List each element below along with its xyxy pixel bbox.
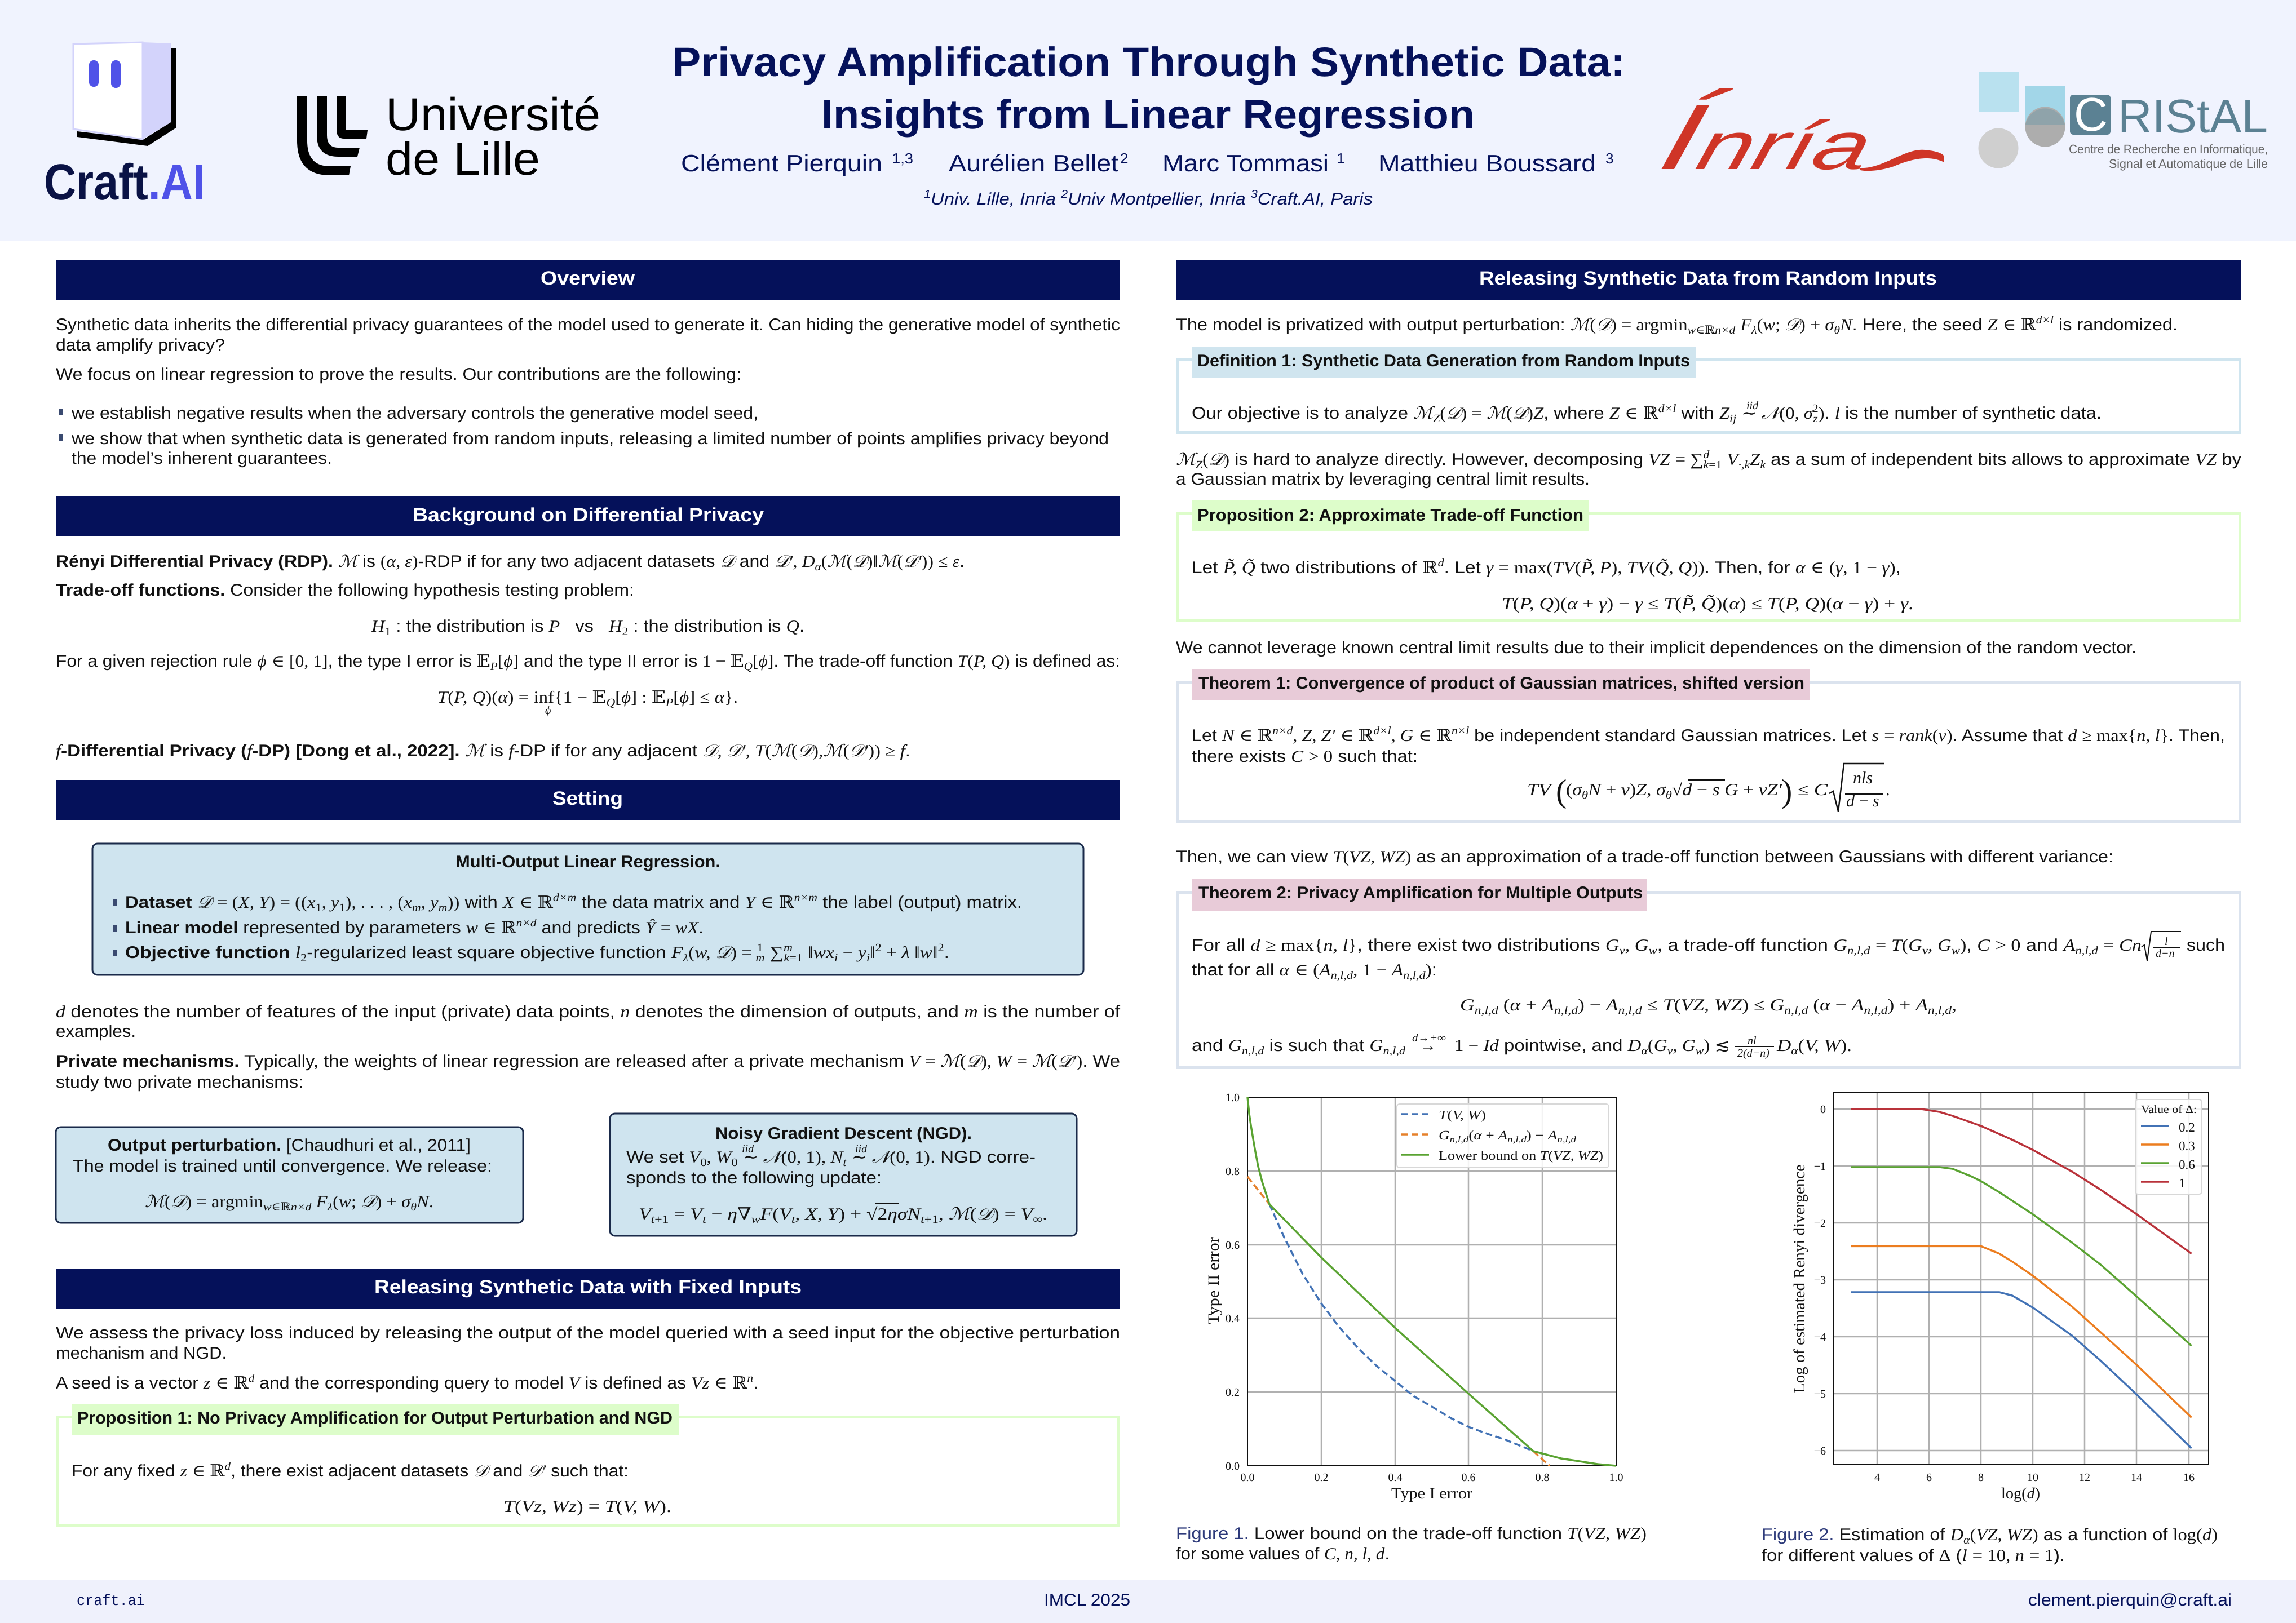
panel: overview xyxy=(56,260,1120,468)
heading: random inputs: Releasing Synthetic Data from Random Inputs xyxy=(1479,268,1937,289)
axis labels: 0.6 xyxy=(1226,1239,1240,1252)
caption: figure 2: for different values of Δ (l = 10, n = 1). xyxy=(1762,1546,2065,1565)
legend: Lower bound on T(VZ, WZ ) xyxy=(1439,1148,1603,1163)
callout: multi-output linear regression xyxy=(92,844,1083,975)
text: f-DP definition: f-Differential Privacy ( f-DP) [Dong et al., 2022]. ℳ is f-DP if for any adjacent 𝒟, 𝒟′, T (ℳ(𝒟),ℳ(𝒟′)) ≥ f. xyxy=(56,742,910,760)
heading: overview: Overview xyxy=(541,268,635,289)
footer: IMCL 2025 xyxy=(1044,1591,1130,1609)
box: proposition 2 xyxy=(1177,500,2240,621)
text: RDP definition: Rényi Differential Privacy (RDP). ℳ is (α, ε)-RDP if for any two adjacent datasets 𝒟 and 𝒟′, Dα(ℳ(𝒟)‖ℳ(𝒟′)) ≤ ε. xyxy=(56,552,965,573)
legend: Value of Δ: xyxy=(2141,1103,2197,1116)
logo: CRIStAL: Signal et Automatique de Lille xyxy=(2109,157,2268,171)
text: fixed inputs intro xyxy=(56,1324,1120,1393)
axis labels: 8 xyxy=(1978,1471,1984,1484)
list: contributions: we show that when synthetic data is generated from random inputs, releasing a limited number of points amplifies privacy beyond xyxy=(71,429,1109,448)
box: definition 1: iid xyxy=(1746,400,1759,412)
box: theorem 2: and Gn,l,d is such that Gn,l,d xyxy=(1192,1036,1406,1057)
legend: T(V, W ) xyxy=(1439,1108,1486,1122)
text: fixed inputs intro: We assess the privacy loss induced by releasing the output of the model queried with a seed input for the objective perturbation xyxy=(56,1324,1120,1342)
callout: noisy gradient descent: iid xyxy=(855,1143,868,1155)
text: decomposition xyxy=(1176,449,2241,489)
callout: output perturbation: Output perturbation. [Chaudhuri et al., 2011] xyxy=(108,1136,471,1155)
axis labels: 1.0 xyxy=(1609,1471,1623,1484)
box: definition 1: Our objective is to analyze ℳZ(𝒟) = ℳ(𝒟)Z, where Z ∈ ℝd×l with Zij ∼ 𝒩(0, σz2). l is the number of synthetic data. xyxy=(1192,402,2102,425)
box: theorem 2: Theorem 2: Privacy Amplification for Multiple Outputs xyxy=(1198,884,1643,902)
legend: 0.3 xyxy=(2179,1139,2195,1153)
axis labels: 0.4 xyxy=(1388,1471,1403,1484)
callout: multi-output linear regression: Multi-Output Linear Regression. xyxy=(455,853,720,871)
heading: fixed inputs: Releasing Synthetic Data with Fixed Inputs xyxy=(374,1276,802,1298)
box: theorem 2: Gn,l,d (α + An,l,d) − An,l,d ≤ T(VZ, WZ ) ≤ Gn,l,d (α − An,l,d) + An,l,d, xyxy=(1460,996,1957,1017)
callout: output perturbation: ℳ(𝒟) = argmin w∈ℝn×d Fλ(w; 𝒟) + σθN. xyxy=(145,1192,433,1213)
formula: trade-off function: ϕ xyxy=(545,704,551,717)
text: fixed inputs intro: A seed is a vector z ∈ ℝd and the corresponding query to model V is defined as Vz ∈ ℝn. xyxy=(56,1372,758,1393)
callout: multi-output linear regression: Objective function l2-regularized least square objective function Fλ(w, 𝒟) = 1m ∑mk=1 ‖wxi − yi‖2 + λ ‖w‖2. xyxy=(125,942,949,964)
box: theorem 1: . xyxy=(1886,781,1890,799)
axis labels: −2 xyxy=(1814,1217,1826,1230)
heading: fixed inputs xyxy=(56,1269,1120,1309)
box: theorem 2: nl xyxy=(1748,1035,1757,1047)
formula: hypotheses: H1 : the distribution is P vs H2 : the distribution is Q. xyxy=(371,617,804,638)
axis labels: −5 xyxy=(1814,1388,1826,1400)
text: trade-off functions: Trade-off functions. Consider the following hypothesis testing problem: xyxy=(56,581,634,600)
authors: Marc Tommasi xyxy=(1162,150,1329,176)
box: theorem 2: d−n xyxy=(2156,947,2175,960)
text: central limit note: We cannot leverage known central limit results due to their implicit dependences on the dimension of the random vector. xyxy=(1176,638,2136,657)
axis labels: log(d) xyxy=(2001,1485,2040,1502)
axis labels: 12 xyxy=(2079,1471,2090,1484)
box: theorem 1: ( xyxy=(1556,773,1567,809)
formula: trade-off function: T(P, Q)(α) = inf{1 − 𝔼 Q[ϕ] : 𝔼 P[ϕ] ≤ α}. xyxy=(437,688,738,709)
callout: noisy gradient descent: sponds to the following update: xyxy=(626,1169,882,1187)
logo: Université de Lille: Université xyxy=(386,89,600,140)
axis labels xyxy=(1205,1092,1623,1502)
legend: Gn,l,d(α + An,l,d) − An,l,d xyxy=(1439,1128,1577,1145)
axis labels: 1.0 xyxy=(1226,1092,1240,1104)
caption: figure 1: Figure 1. Lower bound on the trade-off function T(VZ, WZ ) xyxy=(1176,1524,1647,1543)
footer: clement.pierquin@craft.ai xyxy=(2028,1591,2232,1609)
legend xyxy=(2135,1099,2202,1194)
callout: multi-output linear regression: Dataset 𝒟 = (X, Y) = ((x1, y1), . . . , ( xm, ym)) with X ∈ ℝ d×m the data matrix and Y ∈ ℝ n×m the label (output) matrix. xyxy=(125,892,1022,914)
axis labels: 0.6 xyxy=(1461,1471,1476,1484)
axis labels xyxy=(1791,1103,2195,1502)
box: theorem 2: that for all α ∈ (An,l,d, 1 − An,l,d): xyxy=(1192,961,1437,982)
box: theorem 2: d→+∞ xyxy=(1412,1032,1446,1044)
box: theorem 1: d − s xyxy=(1846,792,1879,810)
axis labels: 0.8 xyxy=(1226,1165,1240,1178)
logo: Université de Lille: de Lille xyxy=(386,134,540,185)
figure 1: trade-off chart xyxy=(1205,1092,1623,1502)
authors: Clément Pierquin xyxy=(681,150,882,176)
legend: 0.6 xyxy=(2179,1158,2195,1172)
caption: figure 1 xyxy=(1176,1524,1647,1563)
text: private mechanisms xyxy=(56,1052,1120,1092)
axis labels: Type I error xyxy=(1391,1485,1473,1502)
logo: CRIStAL: Centre de Recherche en Informatique, xyxy=(2069,142,2268,156)
axis labels: 0.2 xyxy=(1315,1471,1328,1484)
text: private mechanisms: study two private mechanisms: xyxy=(56,1073,303,1092)
list: contributions: the model’s inherent guarantees. xyxy=(72,449,332,468)
box: proposition 1 xyxy=(57,1404,1118,1525)
axis labels: 14 xyxy=(2131,1471,2142,1484)
list: contributions: we establish negative results when the adversary controls the generative model seed, xyxy=(71,404,758,423)
text: overview intro: Synthetic data inherits the differential privacy guarantees of the model used to generate it. Can hiding the generative model of synthetic xyxy=(56,316,1120,334)
box: proposition 2: Proposition 2: Approximate Trade-off Function xyxy=(1197,506,1583,525)
box: theorem 1: (σθN + v)Z, σ θ√d − s G + vZ′ xyxy=(1566,781,1782,801)
logo: CRIStAL: C xyxy=(2074,88,2108,141)
axis labels: 10 xyxy=(2027,1471,2038,1484)
text: notation xyxy=(56,1003,1121,1041)
title xyxy=(672,39,1625,138)
callout: output perturbation xyxy=(56,1127,523,1223)
callout: output perturbation: The model is trained until convergence. We release: xyxy=(73,1157,492,1176)
authors: Matthieu Boussard xyxy=(1378,150,1596,176)
caption: figure 2 xyxy=(1762,1526,2218,1565)
title: Insights from Linear Regression xyxy=(821,92,1475,138)
legend xyxy=(1397,1104,1609,1168)
text: overview intro: We focus on linear regression to prove the results. Our contributions are the following: xyxy=(56,365,741,384)
box: theorem 2: Dα(V, W ). xyxy=(1776,1036,1852,1057)
logo: CRIStAL: RIStAL xyxy=(2118,90,2268,143)
box: proposition 1: For any fixed z ∈ ℝd, there exist adjacent datasets 𝒟 and 𝒟′ such that: xyxy=(72,1460,629,1480)
caption: figure 1: for some values of C, n, l, d. xyxy=(1176,1545,1390,1563)
affiliations: 1Univ. Lille, Inria 2Univ Montpellier, Inria 3Craft.AI, Paris xyxy=(924,188,1373,209)
caption: figure 2: Figure 2. Estimation of Dα(VZ, WZ ) as a function of log(d) xyxy=(1762,1526,2218,1546)
axis labels: 0.4 xyxy=(1226,1312,1240,1325)
box: theorem 2 xyxy=(1177,879,2240,1067)
authors xyxy=(681,150,1613,176)
logo: Craft.AI xyxy=(44,42,205,211)
axis labels: 0 xyxy=(1820,1103,1826,1116)
axis labels: −4 xyxy=(1814,1331,1826,1343)
authors: 3 xyxy=(1605,150,1613,167)
figure 2: renyi divergence chart xyxy=(1791,1093,2209,1502)
logo: Inria xyxy=(1651,85,1944,189)
box: definition 1: Definition 1: Synthetic Data Generation from Random Inputs xyxy=(1197,352,1690,370)
box: theorem 2: 1 − Id pointwise, and Dα(Gv, Gw) ≲ xyxy=(1454,1036,1730,1057)
list: contributions xyxy=(59,404,1109,468)
callout: multi-output linear regression: Linear model represented by parameters w ∈ ℝn×d and predicts Ŷ = wX. xyxy=(125,917,704,937)
callout: noisy gradient descent: We set V0, W0 ∼ 𝒩(0, 1), Nt ∼ 𝒩(0, 1). NGD corre- xyxy=(626,1148,1036,1169)
callout: noisy gradient descent: Vt+1 = Vt − η∇wF(Vt, X, Y ) + √2 ησN t+1, ℳ(𝒟) = V∞. xyxy=(639,1205,1047,1226)
authors: 1 xyxy=(1337,150,1344,167)
footer: craft.ai xyxy=(77,1593,145,1610)
axis labels: Type II error xyxy=(1205,1236,1223,1324)
heading: background: Background on Differential Privacy xyxy=(413,504,764,526)
text: overview intro xyxy=(56,316,1120,384)
axis labels: 16 xyxy=(2183,1471,2195,1484)
box: theorem 2: For all d ≥ max{ n, l}, there exist two distributions Gv, G w, a trade-off function Gn,l,d = T(Gv, G w), C > 0 and An,l,d = Cn xyxy=(1192,936,2142,957)
axis labels: −6 xyxy=(1814,1445,1826,1457)
text: approximation note: Then, we can view T(VZ, WZ ) as an approximation of a trade-off function between Gaussians with different variance: xyxy=(1176,848,2113,866)
box: theorem 1: ≤ C xyxy=(1798,781,1828,799)
text: decomposition: a Gaussian matrix by leveraging central limit results. xyxy=(1176,470,1590,489)
heading: background xyxy=(56,496,1120,536)
heading: overview xyxy=(56,260,1120,300)
axis labels: 0.0 xyxy=(1240,1471,1255,1484)
box: theorem 1: nls xyxy=(1853,769,1873,787)
authors: 1,3 xyxy=(892,150,913,167)
authors: 2 xyxy=(1120,150,1128,167)
heading: setting: Setting xyxy=(552,788,623,809)
text: model privatization: The model is privatized with output perturbation: ℳ(𝒟) = argmin w∈ℝn×d Fλ(w; 𝒟) + σθN. Here, the seed Z ∈ ℝd×l is randomized. xyxy=(1176,314,2178,336)
panel: setting xyxy=(56,780,1121,1236)
text: fixed inputs intro: mechanism and NGD. xyxy=(56,1344,227,1363)
text: overview intro: data amplify privacy? xyxy=(56,336,225,354)
legend: 1 xyxy=(2179,1176,2185,1190)
box: theorem 2: 2(d−n) xyxy=(1737,1047,1769,1059)
box: definition 1 xyxy=(1177,347,2240,433)
heading: setting xyxy=(56,780,1120,820)
box: theorem 1 xyxy=(1177,669,2240,822)
text: rejection rule: For a given rejection rule ϕ ∈ [0, 1], the type I error is 𝔼P[ϕ] and the type II error is 1 − 𝔼Q[ϕ]. The trade-off function T(P, Q) is defined as: xyxy=(56,652,1120,673)
text: decomposition: ℳZ(𝒟) is hard to analyze directly. However, decomposing VZ = ∑dk=1 V·,kZk as a sum of independent bits allows to approximate VZ by xyxy=(1176,449,2241,471)
panel: random inputs xyxy=(1176,260,2241,1067)
text: notation: d denotes the number of features of the input (private) data points, n denotes the dimension of outputs, and m is the number of xyxy=(56,1003,1121,1021)
axis labels: 0.0 xyxy=(1226,1460,1240,1473)
header band xyxy=(0,0,2296,241)
callout: noisy gradient descent xyxy=(610,1114,1077,1236)
axis labels: 6 xyxy=(1926,1471,1932,1484)
box: theorem 1: Theorem 1: Convergence of product of Gaussian matrices, shifted version xyxy=(1198,674,1804,693)
panel: background on differential privacy xyxy=(56,496,1120,760)
box: theorem 1: TV xyxy=(1527,781,1553,799)
legend: 0.2 xyxy=(2179,1120,2195,1134)
box: theorem 2: such xyxy=(2187,936,2225,955)
box: proposition 1: T(Vz, Wz ) = T(V, W ). xyxy=(503,1497,671,1516)
box: theorem 1: ) xyxy=(1781,773,1792,809)
box: theorem 2: → xyxy=(1419,1036,1436,1055)
logo: Université de Lille xyxy=(297,89,600,185)
callout: noisy gradient descent: Noisy Gradient Descent (NGD). xyxy=(715,1124,972,1143)
axis labels: −3 xyxy=(1814,1274,1826,1287)
logo: Craft.AI: Craft.AI xyxy=(44,154,205,211)
box: proposition 2: T(P, Q )(α + γ) − γ ≤ T(P̃, Q̃ )(α) ≤ T(P, Q )(α − γ) + γ. xyxy=(1502,595,1913,613)
logo: Inria: Ínría xyxy=(1651,85,1886,189)
footer xyxy=(0,1580,2296,1623)
axis labels: 0.8 xyxy=(1536,1471,1549,1484)
logo: CRIStAL xyxy=(1979,72,2268,171)
box: theorem 2: l xyxy=(2165,935,2168,948)
callout: noisy gradient descent: iid xyxy=(742,1143,754,1155)
text: private mechanisms: Private mechanisms. Typically, the weights of linear regression are released after a private mechanism V = ℳ(𝒟), W = ℳ(𝒟′). We xyxy=(56,1052,1120,1071)
box: proposition 2: Let P̃, Q̃ two distributions of ℝd. Let γ = max( TV(P̃, P), TV(Q̃, Q)). Then, for α ∈ (γ, 1 − γ), xyxy=(1192,557,1901,577)
box: theorem 1: there exists C > 0 such that: xyxy=(1192,747,1418,766)
box: theorem 1: Let N ∈ ℝn×d, Z, Z′ ∈ ℝd×l, G ∈ ℝn×l be independent standard Gaussian matrices. Let s = rank(v). Assume that d ≥ max{n, l}. Then, xyxy=(1192,725,2225,745)
axis labels: 0.2 xyxy=(1226,1386,1240,1399)
axis labels: Log of estimated Renyi divergence xyxy=(1791,1164,1808,1393)
axis labels: −1 xyxy=(1814,1160,1826,1173)
axis labels: 4 xyxy=(1874,1471,1880,1484)
panel: fixed inputs xyxy=(56,1269,1120,1525)
text: notation: examples. xyxy=(56,1022,136,1041)
heading: random inputs xyxy=(1176,260,2241,300)
box: proposition 1: Proposition 1: No Privacy Amplification for Output Perturbation and NGD xyxy=(77,1409,673,1427)
title: Privacy Amplification Through Synthetic Data: xyxy=(672,39,1625,85)
authors: Aurélien Bellet xyxy=(949,150,1118,176)
